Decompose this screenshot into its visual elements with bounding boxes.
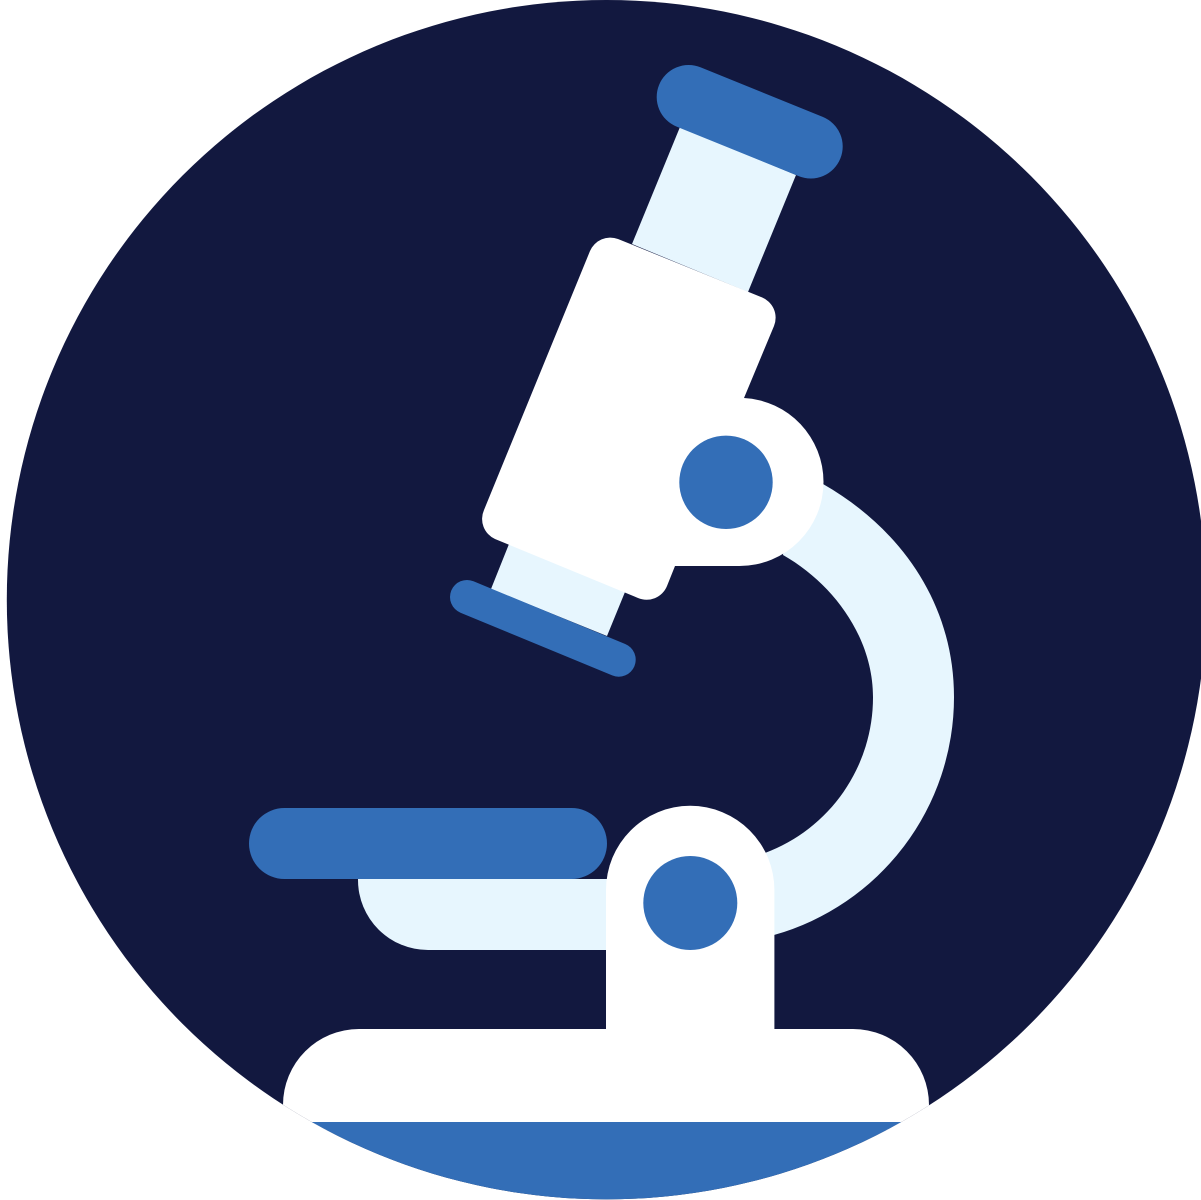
objective lens — [467, 597, 619, 660]
base top — [283, 1029, 929, 1130]
base stripe — [312, 1122, 902, 1200]
microscope body — [482, 238, 824, 600]
lower knob — [643, 856, 737, 950]
lower objective tube — [491, 544, 625, 636]
pillar — [606, 806, 774, 1035]
eyepiece tube — [632, 127, 796, 292]
stage — [249, 808, 607, 879]
stage support — [358, 879, 610, 950]
base — [270, 1029, 940, 1200]
upper knob — [679, 436, 773, 529]
curved arm — [740, 484, 954, 935]
eyepiece cap — [689, 97, 811, 146]
microscope — [249, 97, 954, 1200]
